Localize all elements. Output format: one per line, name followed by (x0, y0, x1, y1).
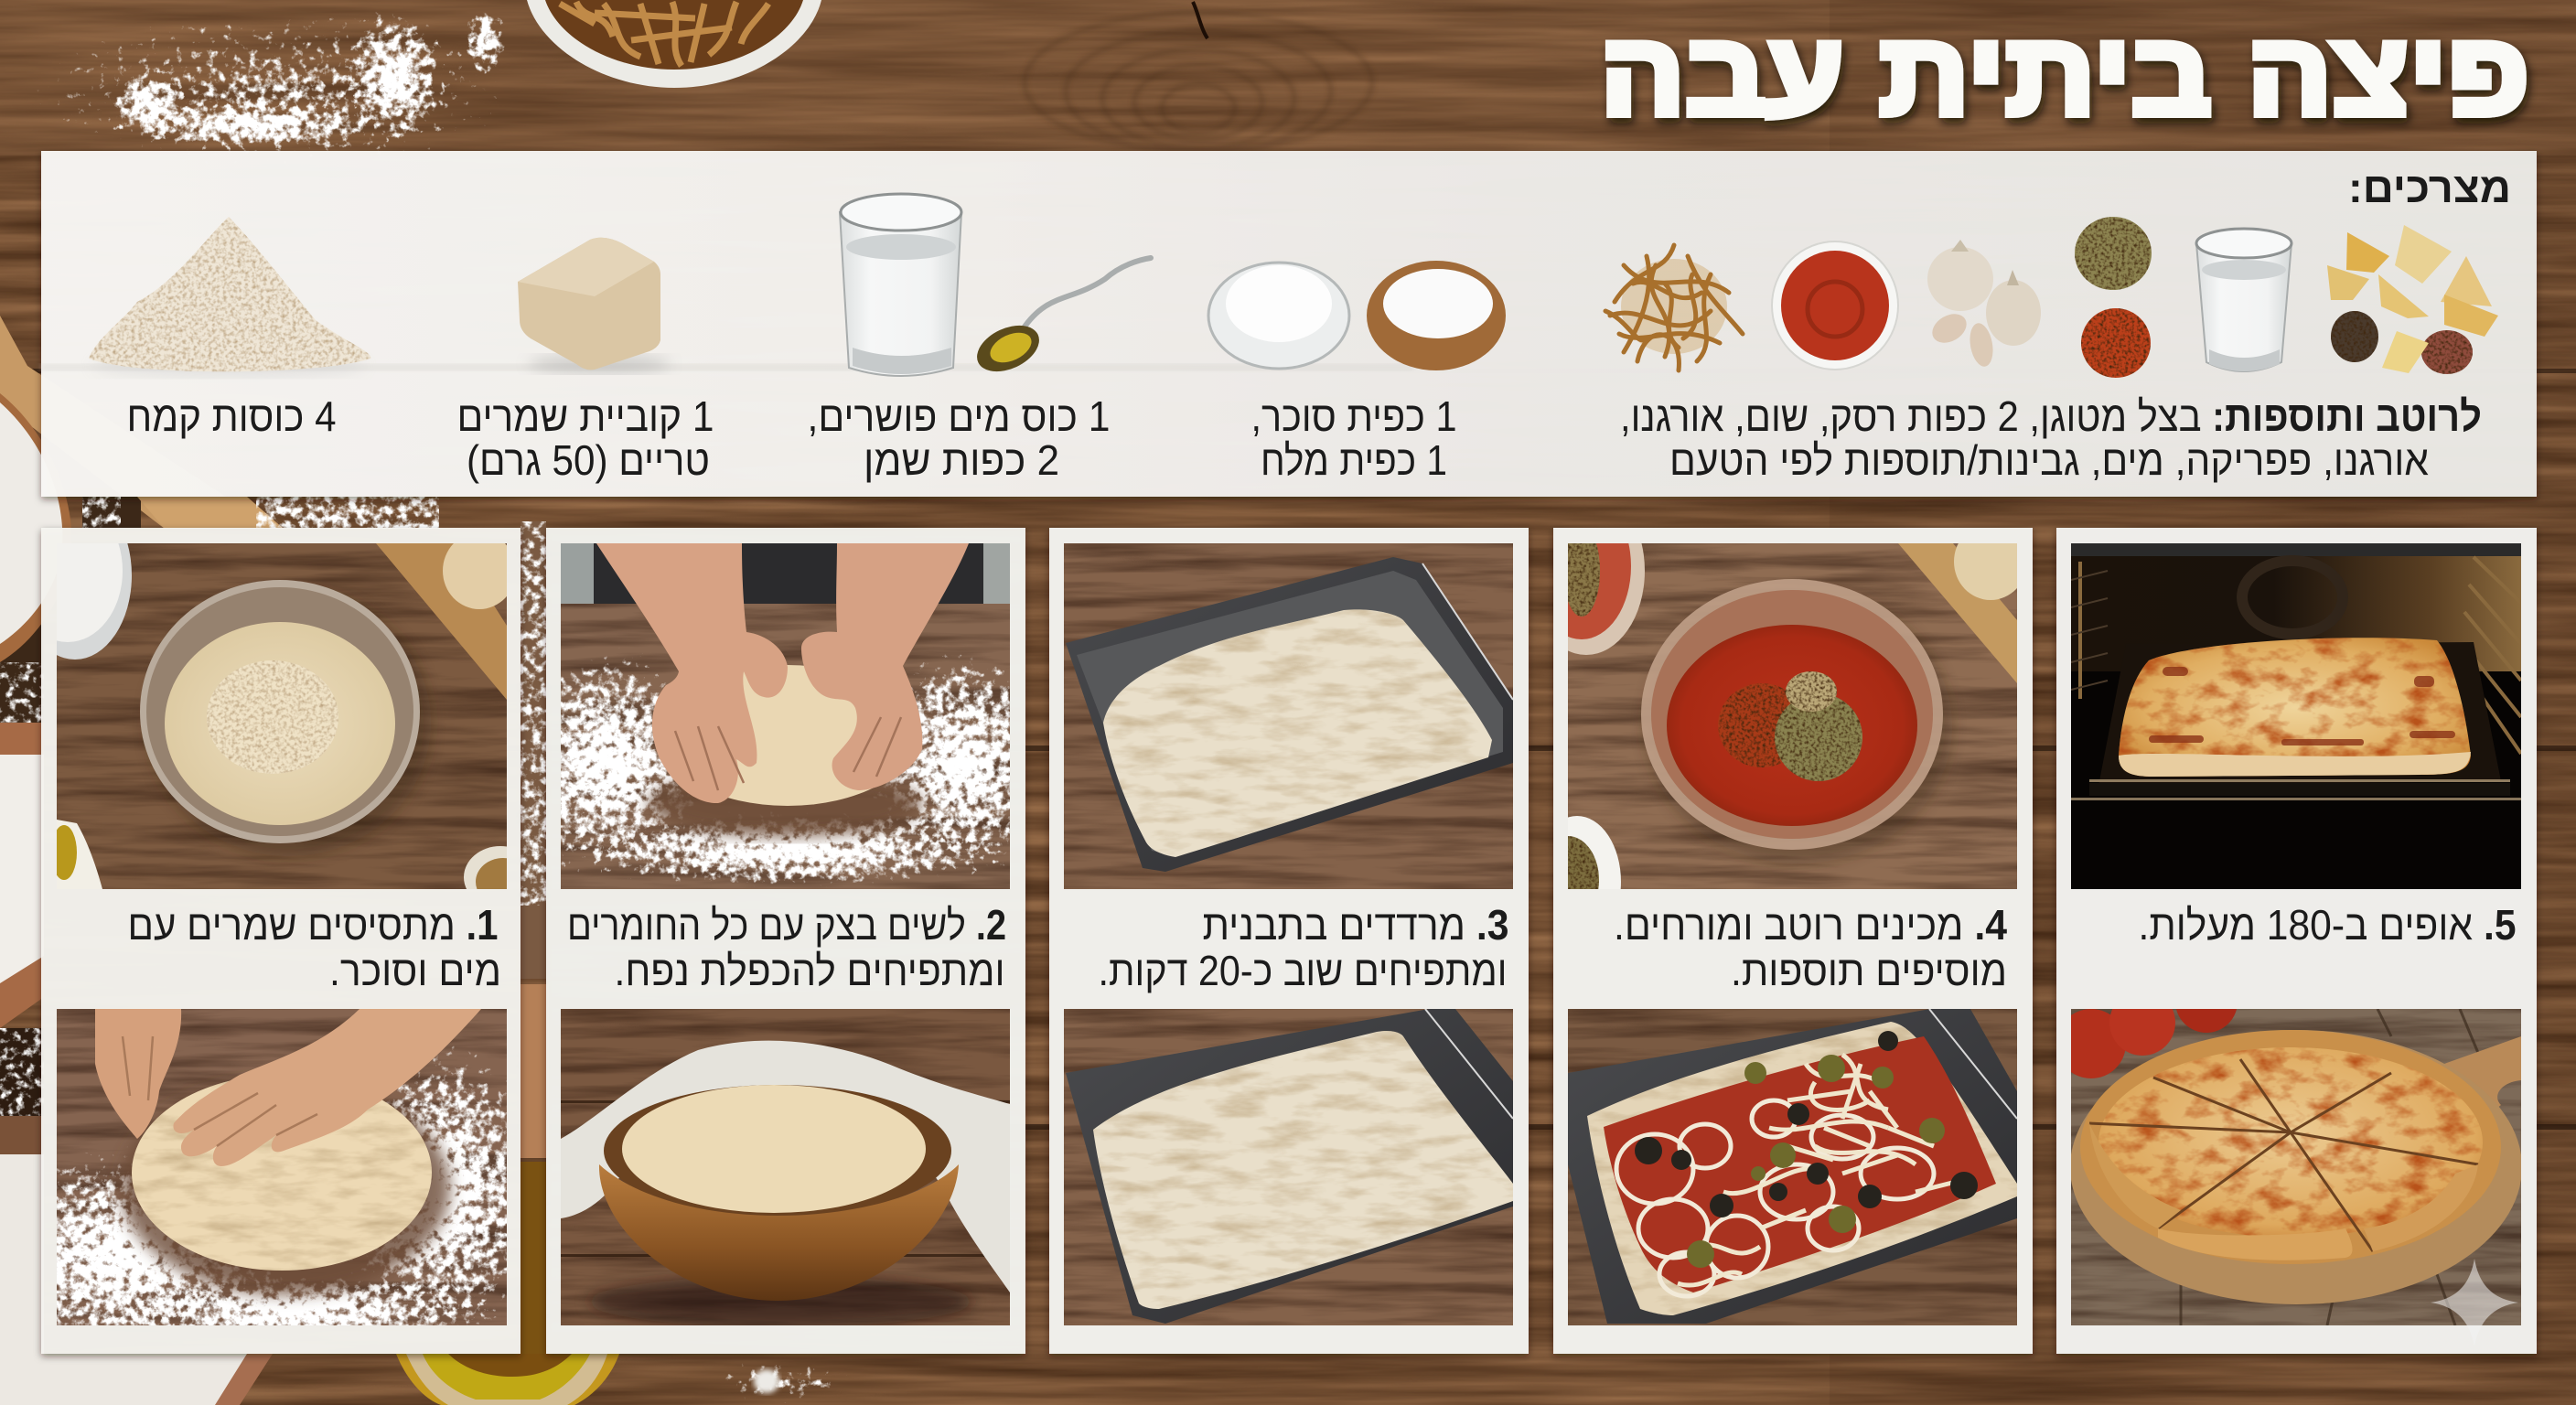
photo: pizza baking in oven (2071, 543, 2521, 889)
panel: ingredients (41, 151, 2537, 497)
icon: oregano pile (2075, 217, 2152, 290)
step 2 caption: 2. לשים בצק עם כל החומרים (567, 901, 1006, 949)
step 1 caption: מים וסוכר. (329, 947, 501, 994)
left edge bowls and spoon (0, 316, 549, 1405)
icon: spoon of oil (970, 258, 1151, 381)
ingredient label: yeast (457, 392, 714, 484)
icon: yeast cube (518, 238, 671, 373)
step 5 caption: 5. אופים ב-180 מעלות. (2139, 901, 2516, 949)
ingredient label: water and oil: 2 כפות שמן (864, 436, 1059, 484)
panel: step 5 (2056, 528, 2537, 1354)
ingredient label: yeast: 1 קוביית שמרים (457, 392, 714, 440)
photo: pizza with toppings in pan (1568, 1009, 2017, 1325)
bowl of fried onions at top edge (527, 0, 821, 88)
panel: step 1 (0, 491, 551, 1366)
icon: glass of water (840, 194, 961, 376)
ingredient label: sugar and salt: 1 כפית מלח (1261, 436, 1447, 484)
step 3 caption: 3. מרדדים בתבנית (1202, 901, 1509, 949)
icon: paprika pile (2081, 308, 2151, 378)
step 3 caption: ומתפיחים שוב כ-20 דקות. (1098, 947, 1508, 994)
ingredients heading: מצרכים: (2348, 164, 2511, 211)
step 2 caption (567, 901, 1006, 994)
ingredient label: sauce and toppings: לרוטב ותוספות: בצל מטוגן, 2 כפות רסק, שום, אורגנו, (1620, 392, 2482, 440)
icon: glass of water 2 (2196, 229, 2292, 371)
icon: salt bowl (1367, 261, 1506, 370)
ingredient label: yeast: טריים (50 גרם) (467, 436, 710, 484)
ingredient label: sauce and toppings: אורגנו, פפריקה, מים, גבינות/תוספות לפי הטעם (1669, 436, 2429, 484)
ingredient label: water and oil: 1 כוס מים פושרים, (807, 392, 1111, 440)
ingredient label: sugar and salt: 1 כפית סוכר, (1251, 392, 1456, 440)
icon: sparkle watermark (2431, 1259, 2518, 1346)
photo: finished sliced pizza (2071, 1009, 2521, 1325)
ingredient label: sugar and salt (1251, 392, 1456, 484)
photo: hands kneading dough ball (561, 543, 1010, 889)
icon: sugar bowl (1208, 263, 1349, 369)
photo: kneading dough with one hand (57, 1009, 507, 1325)
icon: garlic (1927, 240, 2041, 369)
step 3 caption (1098, 901, 1509, 994)
panel: step 3 (1049, 528, 1529, 1354)
panel: step 2 (497, 528, 1064, 1354)
ingredient label: sauce and toppings (1620, 392, 2482, 484)
flour scattered on table (37, 5, 512, 169)
icon: cheeses and toppings (2327, 225, 2498, 374)
step 4 caption: 4. מכינים רוטב ומורחים. (1614, 901, 2007, 949)
title: פיצה ביתית עבה (1600, 9, 2529, 140)
photo: dough risen in pan (1064, 1009, 1513, 1325)
ingredient label: water and oil (807, 392, 1111, 484)
ingredient label: flour: 4 כוסות קמח (126, 392, 337, 440)
photo: dough rising in bowl under towel (561, 1009, 1010, 1325)
panel: step 4 (1528, 487, 2033, 1354)
step 1 caption: 1. מתסיסים שמרים עם (128, 901, 498, 949)
step 4 caption: מוסיפים תוספות. (1731, 947, 2007, 994)
photo: dough rolled in pan (1064, 543, 1513, 889)
photo: yeast mixture in glass bowl (57, 543, 507, 889)
step 4 caption (1614, 901, 2007, 994)
step 2 caption: ומתפיחים להכפלת נפח. (615, 947, 1004, 994)
icon: tomato paste bowl (1772, 241, 1898, 370)
photo: sauce and spices in glass bowl (1568, 543, 2017, 889)
icon: fried onions (1605, 245, 1743, 370)
olive oil dish at bottom (396, 1162, 851, 1405)
step 1 caption (128, 901, 501, 994)
icon: flour pile (89, 217, 370, 377)
